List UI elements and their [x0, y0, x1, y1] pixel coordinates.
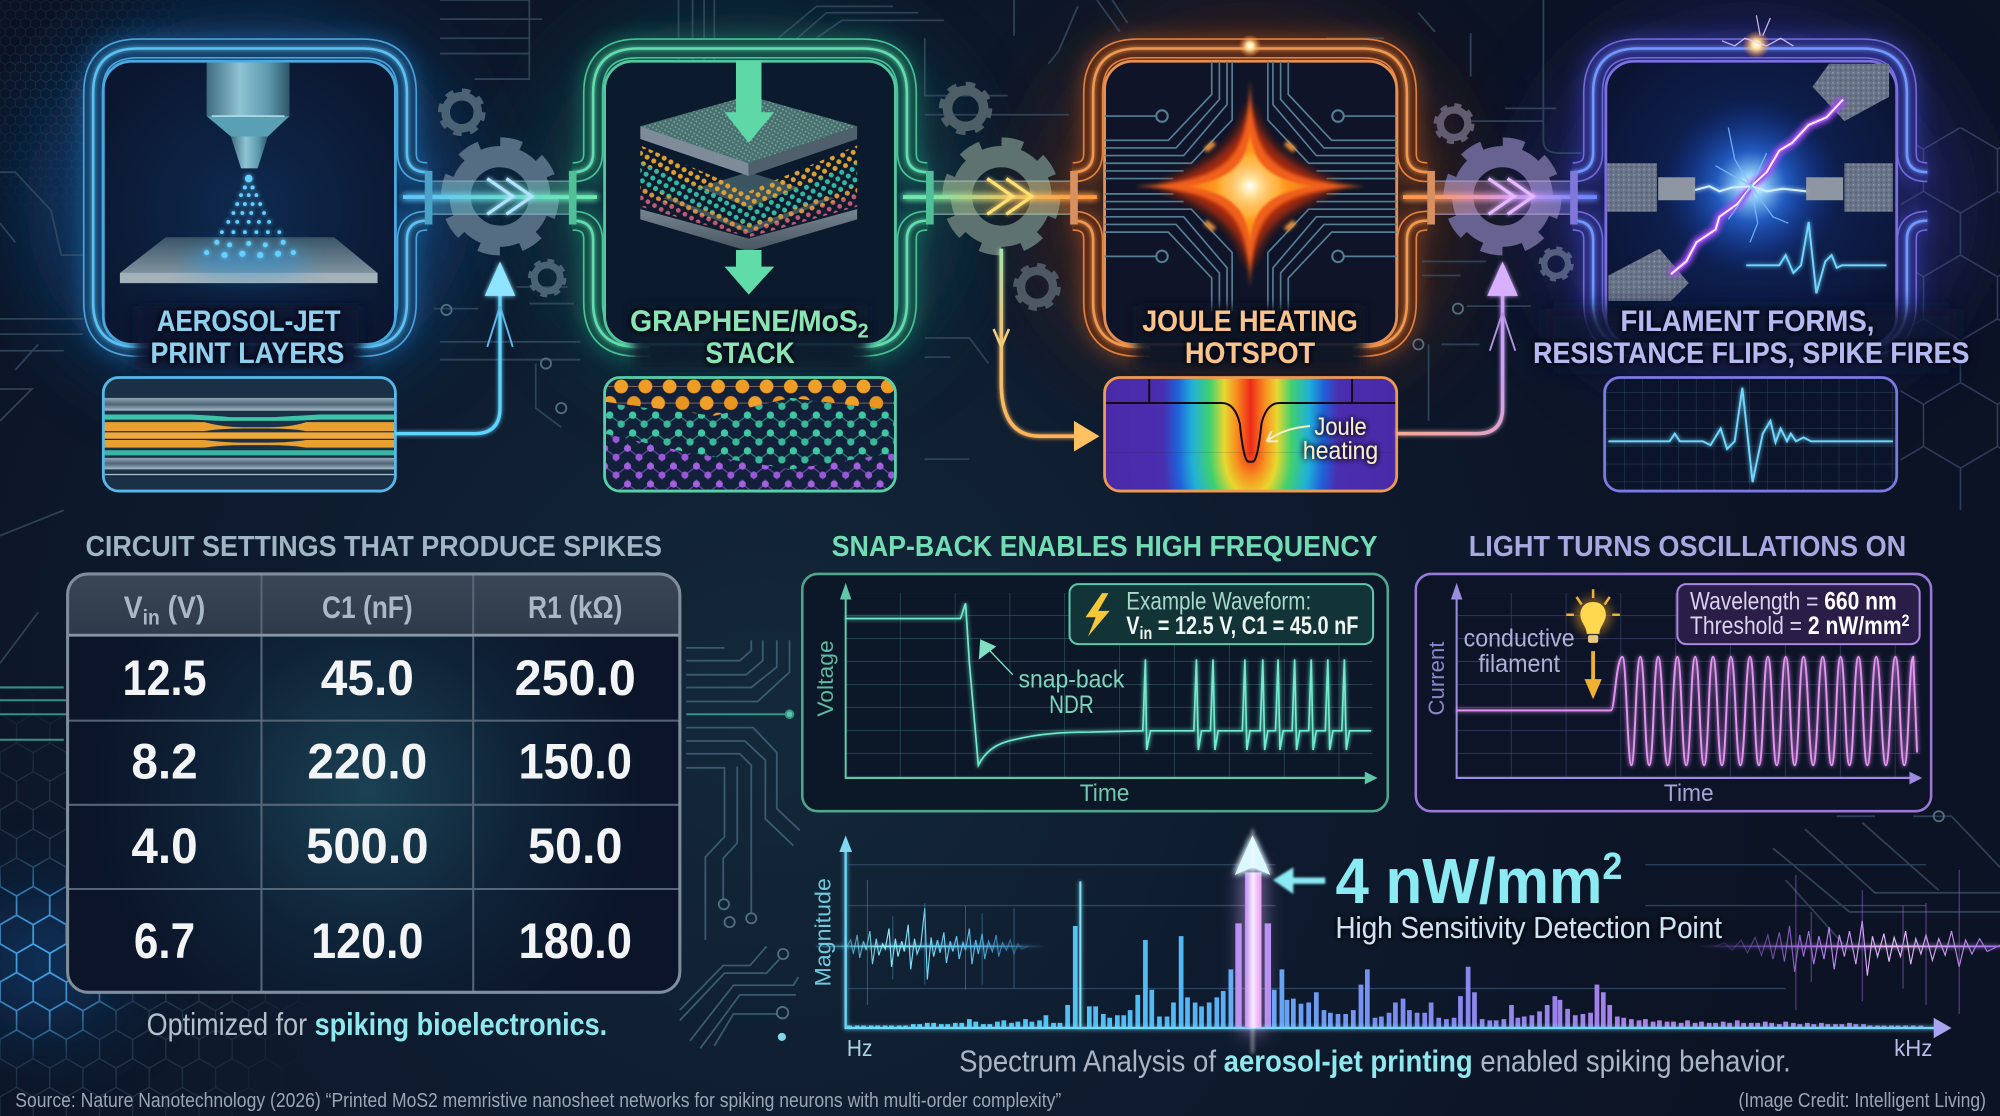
- callout text: = 12.5 V, C1 = 45.0 nF: [1152, 612, 1358, 640]
- callout: wavelength and threshold: Threshold = 2 nW/mm: [1690, 612, 1918, 640]
- glow: top frame hot point: [1239, 34, 1261, 57]
- connector: pipe and gear between panel 2 and 3: [903, 85, 1097, 308]
- label backdrop: [135, 306, 362, 370]
- axis label magnitude: Magnitude: [810, 878, 835, 987]
- label: [630, 305, 869, 370]
- arrow: stack to joule inset: [994, 249, 1099, 452]
- label: JOULE HEATING: [1142, 305, 1358, 338]
- big value caption: High Sensitivity Detection Point: [1335, 911, 1722, 945]
- icon: heated circuit traces: [1102, 61, 1398, 311]
- table values: 500.0: [306, 818, 429, 874]
- noise band left: [816, 880, 1046, 1005]
- icon: main gear: [448, 145, 552, 248]
- label: GRAPHENE/MoS: [630, 305, 866, 338]
- axis label Hz: Hz: [847, 1035, 872, 1061]
- label: RESISTANCE FLIPS, SPIKE FIRES: [1533, 337, 1969, 370]
- label: PRINT LAYERS: [151, 337, 344, 370]
- panel: filament forms: [1533, 15, 1969, 370]
- icon: spray droplets: [204, 175, 296, 258]
- callout: wavelength and threshold: [1677, 584, 1920, 644]
- axis arrowheads: [1451, 583, 1922, 784]
- current trace: [1457, 657, 1917, 765]
- frame: [573, 48, 927, 347]
- frame: [1073, 48, 1427, 347]
- conductive filament annotation: filament: [1478, 650, 1560, 678]
- callout text: in: [1140, 623, 1152, 643]
- glow: top frame spark: [1722, 15, 1793, 59]
- axis label time: Time: [1664, 780, 1714, 807]
- icon: lightning filament: [1671, 99, 1843, 274]
- icon: small gear upper: [1436, 106, 1472, 142]
- table: circuit settings: [68, 574, 680, 992]
- heading: snap-back: SNAP-BACK ENABLES HIGH FREQUENCY: [832, 531, 1378, 563]
- icon: hotspot star: [1135, 79, 1365, 288]
- label: [1533, 305, 1969, 370]
- traces right of table: [680, 640, 800, 1048]
- axis label voltage: Voltage: [813, 640, 838, 717]
- peak bars beside arrow: [1239, 923, 1268, 1028]
- axes: [839, 835, 1952, 1038]
- axes: [846, 587, 1372, 778]
- icon: substrate plate: [120, 237, 378, 283]
- connector: pipe and gear between panel 1 and 2: [403, 91, 597, 295]
- heading: light turns oscillations on: LIGHT TURNS OSCILLATIONS ON: [1469, 531, 1906, 563]
- snap-back annotation: snap-back: [1018, 665, 1125, 693]
- arrow: light down: [1585, 652, 1601, 698]
- inset: thermal map of joule heating: [1105, 378, 1397, 491]
- window: [103, 61, 395, 344]
- callout text: V: [1126, 612, 1143, 640]
- arrow: joule inset to gear: [1397, 261, 1518, 434]
- thin bright peak: [1079, 881, 1081, 1028]
- annotation arrow: [980, 640, 1013, 675]
- inset: spike waveform: [1605, 378, 1897, 491]
- icon: layered material stack: [640, 96, 857, 251]
- icon: small gear upper: [441, 91, 483, 133]
- window: [1606, 61, 1897, 344]
- table values: 6.7: [134, 913, 195, 969]
- table values: 12.5: [122, 650, 207, 706]
- snap-back annotation: NDR: [1049, 691, 1094, 719]
- pipe collars: [1074, 171, 1431, 224]
- connector: pipe and gear between panel 3 and 4: [1403, 106, 1597, 279]
- pipe: [1403, 179, 1597, 214]
- label backdrop: [1546, 309, 1957, 367]
- icon: electrodes: [1607, 64, 1893, 301]
- noise band right: [1696, 870, 2000, 1014]
- window: [1105, 61, 1397, 344]
- axis label current: Current: [1424, 641, 1449, 716]
- arrow: down into stack: [724, 61, 774, 143]
- inset: atomic lattice layers: [605, 378, 895, 491]
- pipe collar: [1571, 171, 1577, 224]
- icon: main gear: [1451, 145, 1554, 248]
- table values: [122, 650, 636, 969]
- joule heating callout: [1303, 413, 1378, 465]
- table values: 180.0: [518, 913, 632, 969]
- table values: 120.0: [311, 913, 423, 969]
- big value: 2: [1602, 845, 1622, 888]
- source citation: Source: Nature Nanotechnology (2026) “Printed MoS2 memristive nanosheet networks for spiking neurons with multi-order complexity”: [15, 1090, 1061, 1112]
- table header: [124, 589, 622, 629]
- icon: small gear lower: [530, 261, 564, 295]
- table header: V: [124, 589, 145, 625]
- table values: 150.0: [518, 734, 632, 790]
- axes: [1457, 587, 1917, 778]
- icon: main gear: [950, 145, 1053, 248]
- label: HOTSPOT: [1185, 337, 1315, 370]
- table header: R1 (kΩ): [528, 589, 622, 625]
- table header: in: [143, 604, 160, 629]
- table values: 45.0: [321, 650, 414, 706]
- label: AEROSOL-JET: [157, 305, 341, 338]
- conductive filament annotation: conductive: [1464, 625, 1575, 653]
- table values: 4.0: [131, 818, 198, 874]
- axis label kHz: kHz: [1894, 1035, 1932, 1061]
- icon: light bulb: [1566, 589, 1620, 643]
- table values: 220.0: [307, 734, 427, 790]
- voltage trace: [846, 603, 1371, 765]
- arrow: print layers to gear: [395, 261, 515, 434]
- callout: wavelength and threshold: Wavelength = 660 nm: [1690, 588, 1897, 616]
- inset: printed layers cross-section: [103, 378, 395, 491]
- conductive filament annotation: [1464, 625, 1575, 678]
- label: [1142, 305, 1358, 370]
- icon: spike trace: [1746, 222, 1886, 293]
- spectrum caption: Spectrum Analysis of aerosol-jet printing enabled spiking behavior.: [959, 1044, 1791, 1078]
- table header: (V): [160, 589, 205, 625]
- arrow: down out of stack: [724, 250, 774, 295]
- pipe collar: [426, 171, 432, 224]
- callout: example waveform: [1070, 584, 1373, 644]
- leader arrow: [1267, 426, 1310, 441]
- icon: small gear lower: [1016, 266, 1058, 308]
- chart: snap-back waveform: [802, 574, 1388, 811]
- big detection arrow: [1235, 829, 1270, 1054]
- callout: wavelength and threshold: 2: [1902, 611, 1909, 630]
- axis label time: Time: [1080, 780, 1129, 807]
- table caption: Optimized for spiking bioelectronics.: [147, 1007, 607, 1042]
- panel: joule heating hotspot: [1073, 34, 1431, 370]
- callout text: Example Waveform:: [1126, 588, 1311, 616]
- arrow: pointer to peak: [1273, 867, 1325, 894]
- pipe: [903, 179, 1097, 214]
- frame: [1573, 48, 1927, 347]
- chart: spectrum analysis: [810, 829, 2000, 1061]
- axis arrowheads: [840, 583, 1378, 784]
- icon: small gear upper: [942, 85, 989, 132]
- frame: [93, 48, 427, 347]
- icon: lightning bolt: [1085, 593, 1110, 636]
- icon: nozzle: [207, 62, 290, 168]
- heading: circuit settings: CIRCUIT SETTINGS THAT PRODUCE SPIKES: [85, 531, 662, 563]
- icon: small gear lower: [1541, 249, 1572, 279]
- snap-back annotation: [1018, 665, 1125, 719]
- label: [151, 305, 344, 370]
- joule heating callout: heating: [1303, 437, 1378, 465]
- pipe: [403, 179, 597, 214]
- label: 2: [858, 320, 869, 342]
- panel: graphene/MoS2 stack: [573, 48, 930, 370]
- window: [605, 61, 895, 344]
- label: STACK: [705, 337, 795, 370]
- panel: aerosol-jet print layers: [93, 48, 429, 370]
- table values: 250.0: [515, 650, 636, 706]
- joule heating callout: Joule: [1314, 413, 1367, 441]
- table header: C1 (nF): [322, 589, 413, 625]
- bars: [849, 926, 1921, 1028]
- label: FILAMENT FORMS,: [1621, 305, 1874, 338]
- chart: light-driven oscillation: [1416, 574, 1931, 811]
- grid lines: [848, 865, 1926, 988]
- big value: 4 nW/mm: [1335, 845, 1619, 917]
- glow: discharge behind centre: [1662, 97, 1841, 275]
- label backdrop: [1135, 306, 1365, 370]
- table values: 8.2: [131, 734, 198, 790]
- label backdrop: [633, 306, 867, 370]
- callout text: [1126, 588, 1358, 643]
- table values: 50.0: [528, 818, 622, 874]
- pipe collars: [573, 171, 930, 224]
